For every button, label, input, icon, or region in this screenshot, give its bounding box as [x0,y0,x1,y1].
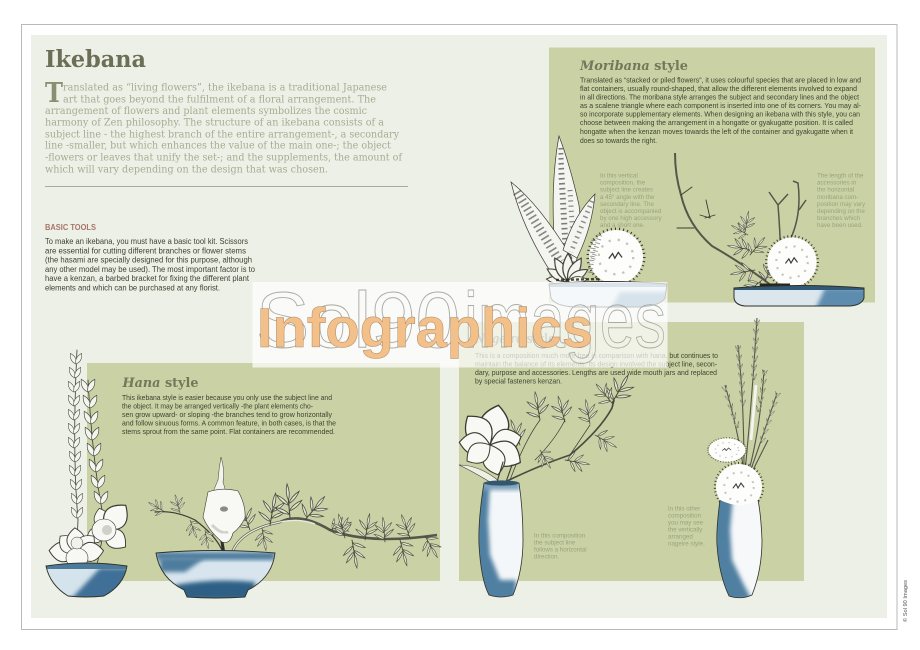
heading: Moribana style: Moribana style [579,59,688,74]
basic tools text: any other model may be used). The most important factor is to [45,265,256,274]
note: vertical moribana: subject line creates [600,187,653,194]
watermark: Sol90images: Sol90 [256,275,460,364]
pot [734,285,864,306]
title: Ikebana [45,46,146,73]
Nageire text [475,351,718,386]
panel: Hana style [87,363,440,581]
Moribana text: as a scalene triangle where each component is inserted into one of its corners. You may al- [580,101,861,110]
basic tools text: (the hasami are specially designed for this purpose, although [45,256,252,264]
intro text: which will vary depending on the design that was chosen. [45,164,328,175]
note: horizontal nageire [534,532,587,560]
note: horizontal moribana: the horizontal [817,187,854,194]
note: vertical moribana: secondary line. The [600,201,654,208]
note: vertical moribana [600,172,662,229]
Nageire text: dary, purpose and accessories. Lengths are used wide mouth jars and replaced [475,368,717,377]
note: horizontal nageire: direction. [534,554,559,560]
note: vertical nageire: arranged [668,534,693,540]
note: horizontal moribana: The length of the [817,172,864,180]
Hana text: stems sprout from the same point. Flat containers are recommended. [122,427,335,436]
heading: Nageire style: Nageire style [474,332,555,347]
note: horizontal moribana: accessories in [817,180,857,187]
illustration: horizontal nageire arrangement [457,368,640,600]
panel: Moribana style [549,48,875,302]
note: horizontal nageire: In this composition [534,532,586,540]
Nageire text: This is a composition much more free in comparison with hana, but continues to [475,351,718,360]
note: horizontal moribana: moribana com- [817,194,858,201]
intro text: line -smaller, but which enhances the value of the main one-; the object [45,141,391,152]
illustration: vertical hana arrangement [46,350,135,600]
Hana text [122,393,336,436]
intro text: ranslated as “living flowers”, the ikebana is a traditional Japanese [63,83,387,94]
watermark: Infographics: Infographics [257,296,593,359]
intro text [45,78,403,175]
Moribana text [580,76,861,145]
watermark: Sol90images [256,275,666,364]
basic tools text: elements and which can be purchased at any florist. [45,283,220,292]
note: horizontal nageire: follows a horizontal [534,546,587,554]
vase [476,480,523,600]
note: vertical moribana: a 45° angle with the [600,194,655,201]
basic tools heading: BASIC TOOLS [45,222,96,232]
note: vertical moribana: object is accompanied [600,208,662,215]
Moribana text: in all directions. The moribana style arranges the subject and secondary lines and the object [580,92,859,101]
note: vertical nageire [668,506,705,548]
Hana text: and follow sinuous forms. A common feature, in both cases, is that the [122,419,336,428]
note: vertical moribana: and a short one. [600,222,645,229]
illustration: vertical nageire arrangement [708,318,781,600]
illustration: sloping hana arrangement [144,457,447,600]
intro text: art that goes beyond the fulfilment of a floral arrangement. The [63,94,376,105]
note: horizontal moribana: position may vary [817,201,866,208]
basic tools text: are essential for cutting different branches or flower stems [45,246,246,255]
pot [46,562,128,598]
intro text: harmony of Zen philosophy. The structure of an ikebana consists of a [45,118,384,129]
illustration: vertical moribana arrangement [511,136,670,310]
Nageire text: maintain the balance of its elements. Its design involved the subject line, secon- [475,360,717,369]
Moribana text: does so towards the right. [580,136,657,145]
note: horizontal nageire: the subject line [534,540,576,546]
basic tools text [45,237,256,292]
note: vertical moribana: by one high accessory [600,215,662,222]
heading: Hana style: Hana style [122,376,198,391]
Hana text: the object. It may be arranged vertically -the plant elements cho- [122,402,313,411]
vase [714,495,762,600]
drop cap: T [45,78,63,109]
note: vertical nageire: In this other [668,506,700,512]
intro text: -flowers or leaves that unify the set-; and the supplements, the amount of [45,152,403,163]
pot [549,282,670,310]
intro text: arrangement of flowers and plant elements symbolizes the cosmic [45,106,367,117]
credit: © Sol 90 Images [902,579,909,622]
Moribana text: hongatte when the kenzan moves towards the left of the container and gyakugatte when it [580,127,853,136]
panel: Nageire style [459,322,804,581]
Moribana text: flat containers, usually round-shaped, that allow the different elements involved to expand [580,84,857,93]
pot [156,550,275,600]
intro text: subject line - the highest branch of the entire arrangement-, a secondary [45,129,399,140]
note: horizontal moribana: have been used. [817,222,863,229]
Moribana text: choose between making the arrangement in a hongatte or gyakugatte position. It is called [580,118,853,127]
note: horizontal moribana [817,172,866,229]
note: vertical nageire: you may see [668,520,704,526]
illustration: horizontal moribana arrangement [675,153,870,310]
basic tools text: To make an ikebana, you must have a basic tool kit. Scissors [45,237,248,246]
watermark: Sol90images: images [464,275,666,364]
note: horizontal moribana: branches which [817,215,861,222]
watermark [252,275,668,368]
note: vertical moribana: composition, the [600,180,646,187]
basic tools text: have a kenzan, a barbed bracket for fixing the different plant [45,274,250,283]
Nageire text: by special fasteners kenzan. [475,377,562,386]
note: vertical moribana: In this vertical [600,172,638,180]
note: vertical nageire: composition [668,512,702,520]
Hana text: This ikebana style is easier because you only use the subject line and [122,393,332,402]
Hana text: sen grow upward- or sloping -the branches tend to grow horizontally [122,410,332,419]
Moribana text: so incorporate supplementary elements. When designing an ikebana with this style, you can [580,110,860,119]
note: horizontal moribana: depending on the [817,208,865,215]
note: vertical nageire: nageire style. [668,540,705,548]
note: vertical nageire: the vertically [668,526,703,534]
Moribana text: Translated as “stacked or piled flowers”, it uses colourful species that are placed in low and [580,76,861,85]
